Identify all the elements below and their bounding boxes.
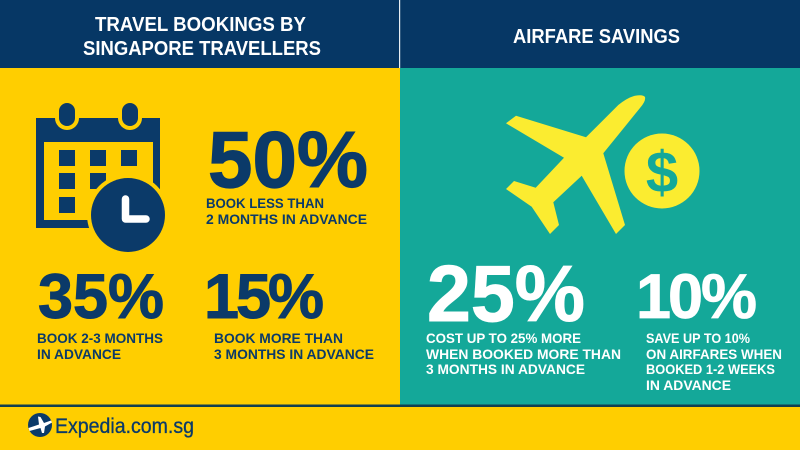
icon: plane and dollar coin: $ bbox=[646, 140, 678, 205]
stat: 25%: 3 MONTHS IN ADVANCE bbox=[426, 361, 585, 377]
stat: 35% bbox=[37, 262, 164, 362]
stat: 35%: BOOK 2-3 MONTHS bbox=[37, 330, 163, 346]
panel: teal airfare background bbox=[400, 68, 800, 405]
header band bbox=[0, 0, 800, 68]
footer rule bbox=[0, 404, 800, 407]
stat: 10%: SAVE UP TO 10% bbox=[646, 330, 750, 346]
stat: 15% bbox=[204, 262, 374, 362]
stat: 25%: WHEN BOOKED MORE THAN bbox=[426, 346, 621, 362]
stat: 25%: 25% bbox=[427, 249, 585, 338]
stat: 50%: BOOK LESS THAN bbox=[206, 195, 324, 211]
heading: travel bookings: TRAVEL BOOKINGS BY bbox=[95, 14, 307, 36]
icon: plane and dollar coin bbox=[506, 95, 700, 234]
stat: 10%: BOOKED 1-2 WEEKS bbox=[646, 361, 775, 377]
stat: 25%: COST UP TO 25% MORE bbox=[426, 330, 581, 346]
logo: Expedia.com.sg: Expedia.com.sg bbox=[55, 414, 194, 438]
icon: calendar with clock bbox=[36, 100, 169, 256]
stat: 10%: ON AIRFARES WHEN bbox=[646, 346, 782, 362]
stat: 10%: 10% bbox=[636, 262, 757, 332]
stat: 10% bbox=[636, 262, 782, 393]
stat: 35%: 35% bbox=[38, 262, 164, 332]
stat: 50%: 50% bbox=[208, 115, 368, 204]
heading: airfare savings: AIRFARE SAVINGS bbox=[513, 26, 680, 48]
stat: 15%: 15% bbox=[204, 262, 324, 332]
heading: travel bookings bbox=[83, 14, 321, 60]
stat: 25% bbox=[426, 249, 621, 377]
stat: 10%: IN ADVANCE bbox=[646, 377, 731, 393]
stat: 15%: BOOK MORE THAN bbox=[214, 330, 343, 346]
stat: 35%: IN ADVANCE bbox=[37, 346, 121, 362]
heading: travel bookings: SINGAPORE TRAVELLERS bbox=[83, 38, 321, 60]
stat: 50%: 2 MONTHS IN ADVANCE bbox=[206, 211, 367, 227]
stat: 15%: 3 MONTHS IN ADVANCE bbox=[214, 346, 374, 362]
